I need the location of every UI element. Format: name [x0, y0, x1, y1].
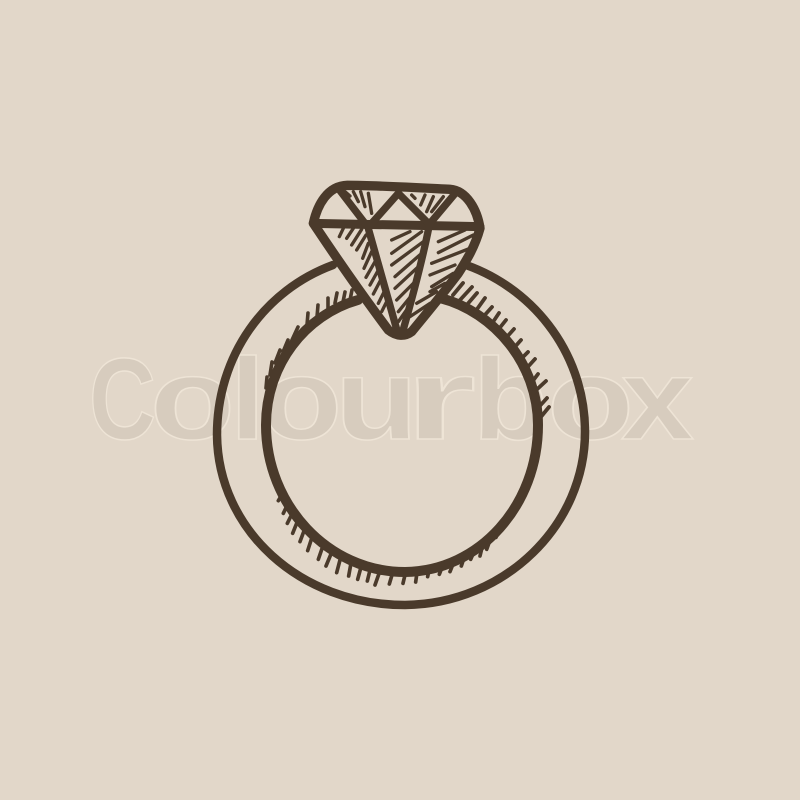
icon: diamond ring [217, 185, 585, 605]
ring hatching: upper right [453, 283, 549, 418]
watermark: Colourbox: o [261, 334, 342, 464]
diamond facets [340, 191, 457, 332]
watermark: Colourbox: C [89, 334, 156, 464]
watermark: Colourbox: l [230, 334, 265, 464]
ring inner edge [266, 298, 538, 572]
ring hatching: upper left [266, 290, 352, 388]
watermark: Colourbox: b [473, 334, 548, 464]
diamond outline [313, 185, 480, 335]
watermark: Colourbox: u [335, 334, 418, 464]
diamond hatching [339, 192, 473, 322]
watermark: Colourbox: o [547, 334, 634, 464]
watermark: Colourbox: o [150, 334, 235, 464]
diamond girdle [313, 223, 480, 227]
watermark: Colourbox [89, 334, 694, 464]
diamond [313, 185, 480, 335]
ring hatching: bottom [278, 495, 507, 585]
watermark: Colourbox: r [405, 334, 476, 464]
ring outer edge [217, 263, 585, 605]
watermark: Colourbox: x [621, 334, 694, 464]
